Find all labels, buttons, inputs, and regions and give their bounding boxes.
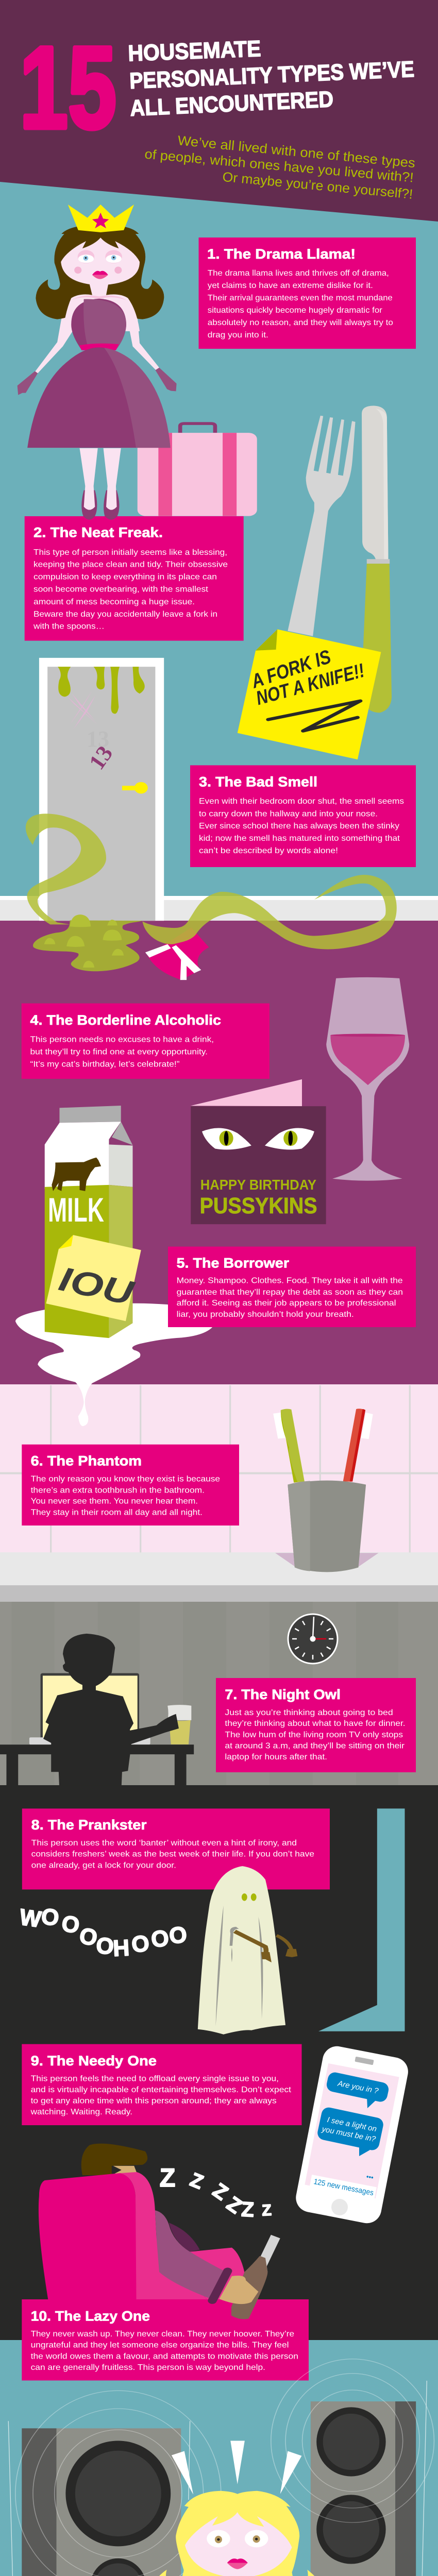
body text: Money. Shampoo. Clothes. Food. They take it all with the xyxy=(177,1277,403,1285)
icon: wine glass xyxy=(326,977,409,1181)
heading: 10. The Lazy One xyxy=(31,2308,150,2324)
body text: Even with their bedroom door shut, the smell seems xyxy=(199,797,404,806)
body text: Just as you’re thinking about going to bed xyxy=(225,1708,393,1717)
sound text: WOOOOHOOO: O xyxy=(60,1911,81,1938)
illustration: bedroom door with slime: 13 xyxy=(84,741,117,774)
body text: This person needs no excuses to have a drink, xyxy=(30,1036,214,1044)
sticky note: a fork is not a knife: A FORK IS xyxy=(248,646,334,693)
body text: watching. Waiting. Ready. xyxy=(30,2108,132,2116)
heading: 5. The Borrower xyxy=(177,1256,290,1271)
intro text: Or maybe you’re one yourself?! xyxy=(222,169,414,202)
body text: to get any alone time with this person around; they are always xyxy=(31,2097,277,2106)
body text xyxy=(33,548,228,631)
wall stripes xyxy=(0,1602,438,1785)
heading: 2. The Neat Freak. xyxy=(33,525,163,540)
snoring letters: Z xyxy=(241,2198,255,2222)
birthday card: HAPPY BIRTHDAY xyxy=(200,1177,316,1193)
panel: 8 The Prankster xyxy=(22,1808,330,1890)
message bubble 1 xyxy=(325,2071,390,2108)
snoring letters: Z xyxy=(261,2202,272,2219)
body text: They stay in their room all day and all night. xyxy=(31,1508,203,1517)
snoring letters xyxy=(160,2163,272,2222)
body text: soon become overbearing, with the smallest xyxy=(33,585,209,594)
body text: “It’s my cat’s birthday, let’s celebrate!” xyxy=(30,1060,179,1069)
panel: 2 The Neat Freak xyxy=(25,516,244,641)
header band xyxy=(0,0,438,222)
heading: 3. The Bad Smell xyxy=(199,774,317,789)
face xyxy=(61,238,140,285)
body text xyxy=(208,269,393,340)
body text: situations quickly become hugely dramatic for xyxy=(208,306,382,315)
icon: wall clock xyxy=(288,1614,338,1664)
torso xyxy=(63,283,140,331)
milk spill xyxy=(15,1303,212,1426)
body text: there’s an extra toothbrush in the bathroom. xyxy=(31,1486,205,1495)
snoring letters: Z xyxy=(160,2163,175,2192)
body text: with the spoons… xyxy=(33,622,105,631)
dress xyxy=(71,299,126,350)
body text: kid; now the smell has matured into something that xyxy=(199,834,400,843)
panel: 6 The Phantom xyxy=(22,1445,239,1526)
illustration: milk carton with IOU note: IOU xyxy=(56,1259,138,1312)
intro text: of people, which ones have you lived with?! xyxy=(144,146,414,185)
heading: 4. The Borderline Alcoholic xyxy=(30,1012,221,1028)
body text: at around 3 a.m, and they’ll be sitting on their xyxy=(225,1741,405,1751)
heading: 7. The Night Owl xyxy=(225,1687,341,1702)
heading: 8. The Prankster xyxy=(31,1817,147,1833)
body text: You never see them. You never hear them. xyxy=(31,1497,198,1506)
illustration: ghost prankster xyxy=(198,1866,297,2035)
body text: The drama llama lives and thrives off of drama, xyxy=(208,269,389,278)
body text: yet claims to have an extreme dislike for it. xyxy=(208,281,373,290)
snoring letters: Z xyxy=(187,2169,206,2194)
body text xyxy=(31,1475,220,1517)
message bubble 2 xyxy=(316,2106,384,2156)
body text xyxy=(177,1277,403,1319)
body text: guarantee that they’ll repay the debt as soon as they can xyxy=(177,1288,403,1297)
body text: and is virtually incapable of entertaining themselves. Don’t expect xyxy=(31,2086,292,2094)
body text: Beware the day you accidentally leave a fork in xyxy=(33,610,217,619)
icon: smartphone with messages: ••• xyxy=(366,2173,374,2181)
body text: Ever since school there has always been the stinky xyxy=(199,822,399,831)
body text xyxy=(31,1839,314,1870)
body text: The low hum of the living room TV only stops xyxy=(225,1731,403,1739)
message bubble 2: you must be in? xyxy=(321,2125,377,2144)
sound text: WOOOOHOOO: H xyxy=(112,1935,130,1961)
body text: absolutely no reason, and they will always try to xyxy=(208,318,393,327)
body text: The only reason you know they exist is because xyxy=(31,1475,220,1484)
body text: This type of person initially seems like a blessing, xyxy=(33,548,227,557)
intro text xyxy=(144,132,416,202)
body text: considers freshers’ week as the best week of their life. If you don’t have xyxy=(31,1850,314,1859)
panel: 3 The Bad Smell xyxy=(190,765,416,867)
icon: smartphone with messages: 125 new messages xyxy=(313,2177,374,2197)
illustration: shocked blonde housemate xyxy=(151,2441,324,2576)
illustration: slime puddle and dirty underwear xyxy=(33,914,209,980)
body text xyxy=(225,1708,406,1761)
heading: 9. The Needy One xyxy=(31,2053,157,2069)
body text: They never wash up. They never clean. They never hoover. They’re xyxy=(31,2330,294,2338)
sound text: WOOOOHOOO: O xyxy=(130,1930,150,1958)
birthday card: PUSSYKINS xyxy=(200,1193,317,1218)
message bubble 1: Are you in ? xyxy=(336,2079,379,2096)
title: HOUSEMATE xyxy=(128,36,261,66)
body text: Their arrival guarantees even the most mundane xyxy=(208,294,393,302)
sound text: WOOOOHOOO: O xyxy=(40,1904,60,1930)
panel: 10 The Lazy One xyxy=(22,2299,309,2380)
icon: smartphone with messages xyxy=(293,2044,411,2226)
sound text: WOOOOHOOO xyxy=(18,1904,188,1961)
birthday card xyxy=(191,1079,326,1224)
hair xyxy=(36,225,164,319)
body text: one already, get a lock for your door. xyxy=(31,1861,176,1870)
body text: can’t be described by words alone! xyxy=(199,846,338,855)
body text: can are generally fruitless. This person is way beyond help. xyxy=(31,2363,265,2372)
panel: 1 The Drama Llama xyxy=(199,238,416,349)
icon: suitcase xyxy=(138,423,257,516)
illustration: milk carton with IOU note: MILK xyxy=(48,1191,104,1229)
illustration: bedroom door with slime: 13 xyxy=(87,726,109,752)
panel: 5 The Borrower xyxy=(15,1247,416,1426)
body text: This person uses the word ‘banter’ without even a hint of irony, and xyxy=(31,1839,297,1848)
illustration: fork and knife xyxy=(288,406,392,713)
arms and gloves xyxy=(35,311,159,373)
title number 15: 15 xyxy=(20,22,116,152)
illustration: doorway light xyxy=(318,1808,405,2031)
panel: 9 The Needy One xyxy=(22,2044,302,2125)
panel: 7 The Night Owl xyxy=(216,1678,416,1772)
heading: 1. The Drama Llama! xyxy=(207,246,356,262)
body text: to carry down the hallway and into your nose. xyxy=(199,809,378,818)
sound text: WOOOOHOOO: O xyxy=(95,1933,114,1959)
body text xyxy=(199,797,404,855)
illustration: toothbrushes in cup xyxy=(273,1409,379,1572)
body text xyxy=(30,1036,214,1069)
heading: 6. The Phantom xyxy=(31,1453,142,1469)
sticky note: a fork is not a knife: NOT A KNIFE!! xyxy=(254,660,367,709)
message bubble 2: I see a light on xyxy=(326,2115,377,2133)
body text: amount of mess becoming a huge issue. xyxy=(33,598,195,606)
body text: liar, you probably shouldn’t hold your breath. xyxy=(177,1310,354,1319)
smell wisps xyxy=(26,814,397,949)
illustration: hand holding beer bottle xyxy=(212,2235,280,2319)
body text: drag you into it. xyxy=(208,331,268,340)
body text: but they’ll try to find one at every opportunity. xyxy=(30,1048,208,1057)
legs and shoes xyxy=(79,448,121,520)
body text xyxy=(30,2075,292,2116)
body text: they’re thinking about what to have for dinner. xyxy=(225,1719,406,1728)
illustration: drama llama woman with crown xyxy=(18,205,177,520)
illustration: milk carton with IOU note xyxy=(45,1106,141,1338)
sound text: WOOOOHOOO: O xyxy=(150,1925,170,1953)
crown xyxy=(68,205,134,232)
sound text: WOOOOHOOO: O xyxy=(77,1923,99,1951)
illustration: lazy person in armchair xyxy=(39,2144,244,2299)
body text: ungrateful and they let someone else organize the bills. They feel xyxy=(31,2341,289,2350)
body text: the world owes them a favour, and attempts to motivate this person xyxy=(31,2352,298,2361)
right speaker xyxy=(311,2401,395,2576)
snoring letters: Z xyxy=(223,2192,246,2218)
intro text: We’ve all lived with one of these types xyxy=(177,132,416,171)
snoring letters: Z xyxy=(209,2179,232,2205)
body text: laptop for hours after that. xyxy=(225,1753,327,1761)
illustration: bedroom door with slime xyxy=(39,658,164,921)
body text xyxy=(31,2330,298,2372)
body text: compulsion to keep everything in its place can xyxy=(33,573,217,582)
milk drip and tile grid xyxy=(0,1382,438,1552)
sticky note: a fork is not a knife xyxy=(238,629,381,759)
panel: 4 The Borderline Alcoholic xyxy=(22,1004,269,1079)
sound text: WOOOOHOOO: W xyxy=(18,1904,43,1933)
illustration: speakers with sound waves xyxy=(8,2359,434,2576)
illustration: night owl silhouette at laptop xyxy=(0,1634,194,1786)
left speaker xyxy=(22,2428,57,2576)
body text: keeping the place clean and tidy. Their obsessive xyxy=(33,561,228,569)
body text: This person feels the need to offload every single issue to you, xyxy=(31,2075,279,2083)
title xyxy=(128,36,415,121)
title: ALL ENCOUNTERED xyxy=(129,87,334,121)
sound text: WOOOOHOOO: O xyxy=(168,1922,188,1949)
body text: afford it. Seeing as their job appears to be professional xyxy=(177,1299,396,1308)
